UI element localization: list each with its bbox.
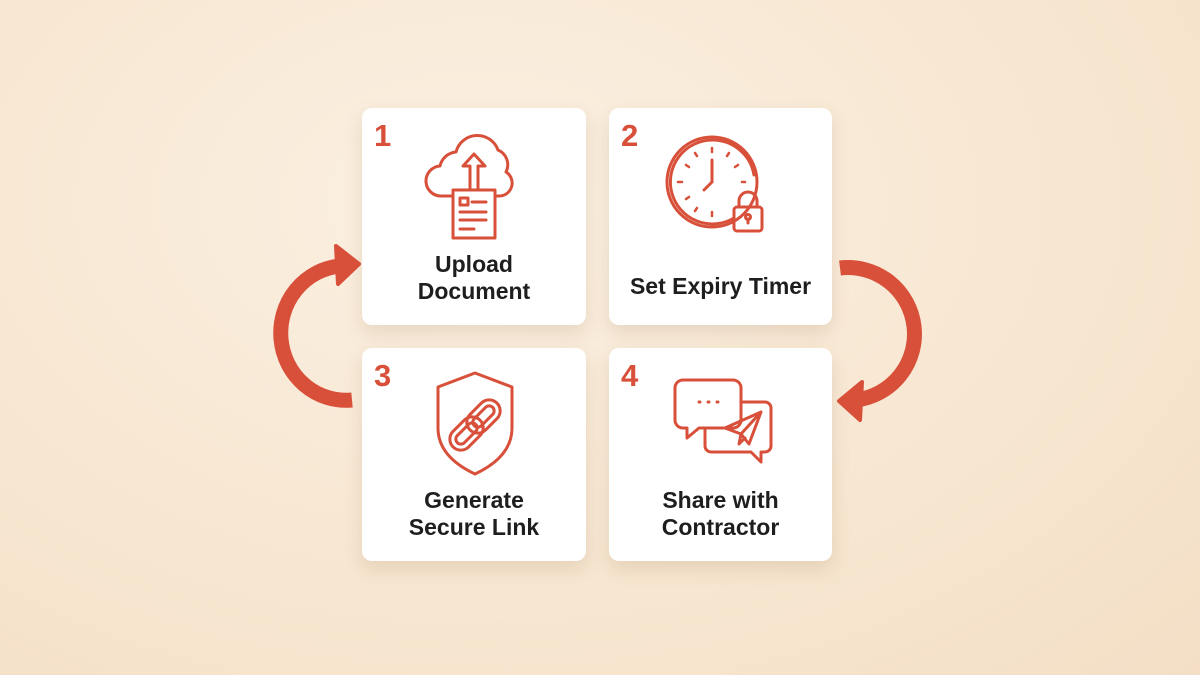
label: Set Expiry Timer: [630, 273, 811, 299]
card 3: generate secure link: [362, 348, 586, 561]
label: Share with: [662, 487, 779, 513]
label: [662, 487, 779, 540]
arrow: left, from card 3 up to card 1: [281, 246, 359, 400]
label: Contractor: [662, 514, 779, 540]
number 4: 4: [621, 358, 638, 393]
label: Secure Link: [409, 514, 539, 540]
label: Upload: [435, 251, 513, 277]
icon: cloud upload document: [424, 134, 514, 240]
card 4: share with contractor: [609, 348, 832, 561]
card 1: upload document: [362, 108, 586, 325]
label: [409, 487, 540, 540]
icon: shield with link: [436, 372, 514, 476]
icon: chat bubbles with paper plane: [674, 378, 772, 464]
label: Generate: [424, 487, 524, 513]
label: Document: [418, 278, 530, 304]
icon: clock with lock: [666, 136, 764, 232]
arrow: right, from card 2 down to card 4: [839, 268, 914, 420]
card 2: set expiry timer: [609, 108, 832, 325]
number 2: 2: [621, 118, 638, 153]
number 3: 3: [374, 358, 391, 393]
number 1: 1: [374, 118, 391, 153]
label: [418, 251, 530, 304]
